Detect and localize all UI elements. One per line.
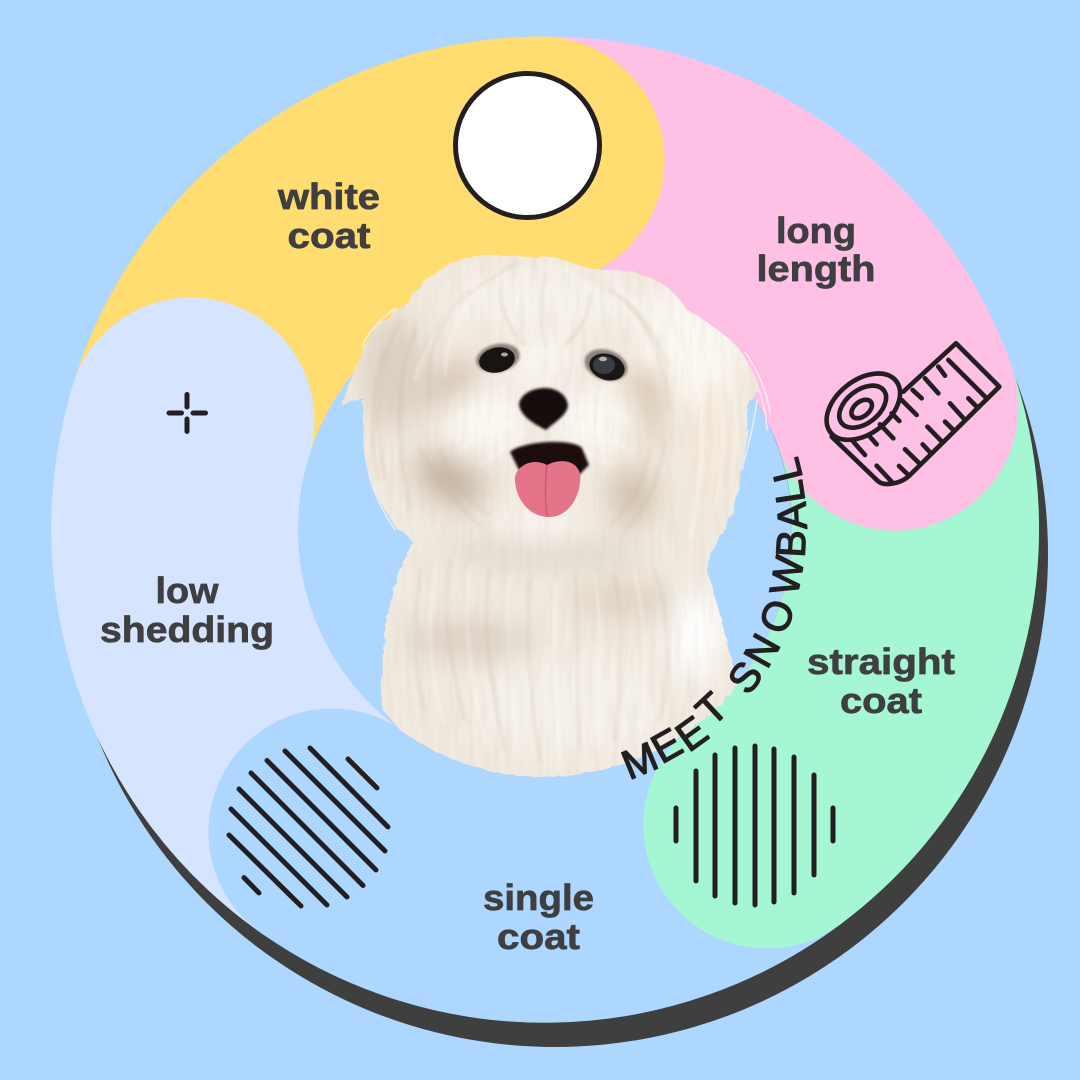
dog nose: [519, 388, 568, 430]
label: white coat: white: [277, 176, 380, 217]
label: long length: long: [776, 210, 856, 251]
dog fur streaks: [346, 257, 752, 771]
label: straight coat: coat: [840, 680, 922, 721]
icon: diagonal single coat hatching: [229, 748, 388, 906]
illustration: white dog Snowball: [330, 250, 770, 780]
icon: vertical straight coat lines: [676, 746, 833, 905]
panel: single coat band: [208, 708, 767, 956]
panel: long length band: [541, 160, 1018, 530]
dog right eye: [580, 344, 632, 386]
label: low shedding: shedding: [100, 609, 274, 650]
panel: white coat band: [191, 36, 664, 421]
icon: low shedding sparse marks: [169, 394, 206, 432]
dog light fur strands: [414, 282, 644, 668]
dog mouth: [510, 442, 589, 476]
panel: low shedding band: [175, 421, 332, 832]
label: straight coat: straight: [807, 641, 955, 682]
label: white coat: coat: [288, 215, 371, 256]
dog silhouette: [342, 255, 760, 777]
icon: white colour swatch: [456, 74, 600, 218]
curved title: meet snowball: MEET SNOWBALL: [615, 454, 816, 788]
centre hole: [298, 282, 792, 776]
dog left eye: [474, 340, 522, 376]
label: low shedding: low: [156, 570, 220, 611]
icon: measuring tape: [814, 343, 999, 484]
dog dark fur strands: [373, 262, 670, 760]
dog fur shading: [345, 255, 750, 771]
label: single coat: coat: [497, 916, 580, 957]
panel: low shedding rounded head: [68, 298, 314, 544]
panel: straight coat band: [644, 407, 916, 948]
dog tongue: [515, 461, 580, 517]
dog hair wisps behind: [363, 308, 770, 530]
label: single coat: single: [483, 877, 594, 918]
label: long length: length: [756, 248, 876, 289]
